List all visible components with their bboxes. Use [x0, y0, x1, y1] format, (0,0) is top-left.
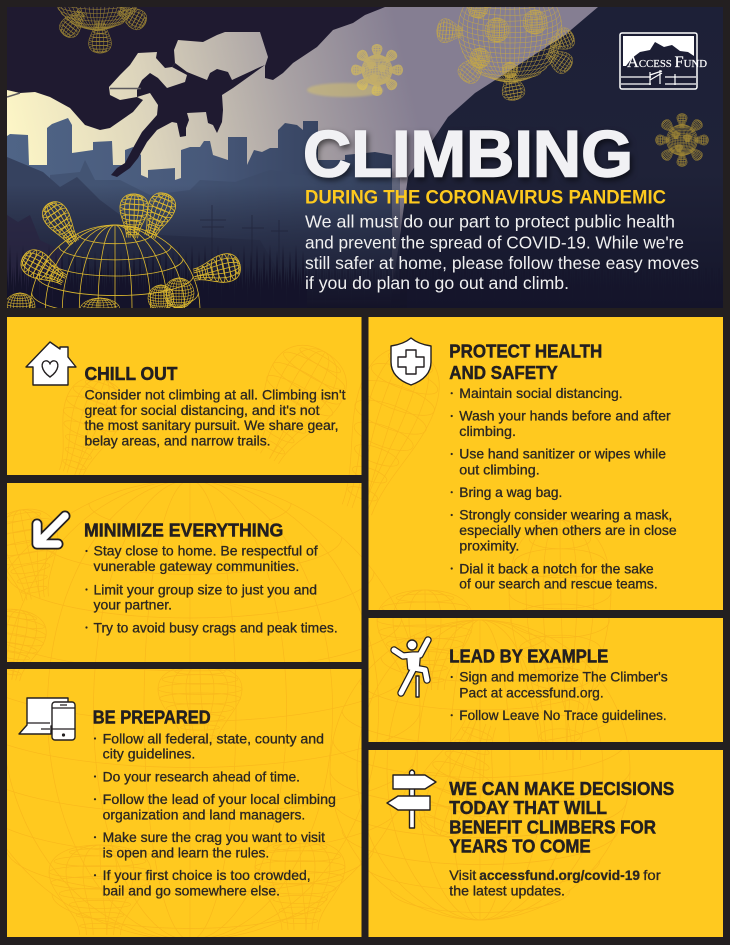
- bullet list: of our search and rescue teams.: [459, 577, 658, 592]
- icon: arrow: [37, 516, 65, 544]
- heading: PROTECT HEALTH: [449, 340, 602, 361]
- virus: mid-sky faded: [352, 44, 402, 96]
- bullet list: [94, 731, 336, 898]
- icon: laptop and phone: [19, 698, 75, 740]
- heading: WE CAN MAKE DECISIONS: [449, 778, 674, 799]
- icon: climber figure: [394, 640, 428, 697]
- heading: [449, 340, 602, 383]
- intro text: if you do plan to go out and climb.: [305, 273, 569, 293]
- intro text: and prevent the spread of COVID-19. While we're: [305, 232, 684, 252]
- bullet list: Limit your group size to just you and: [94, 582, 317, 597]
- bullet list: Stay close to home. Be respectful of: [94, 544, 318, 559]
- bullet list: city guidelines.: [103, 747, 195, 762]
- bullet list: Bring a wag bag.: [459, 485, 562, 500]
- icon: shield with cross: [391, 338, 431, 385]
- panel: minimize everything: [7, 483, 362, 662]
- panel: protect health and safety: [368, 317, 723, 610]
- yellow panel backgrounds with wireframe texture: [0, 317, 723, 940]
- virus: top right wireframe: [436, 7, 575, 100]
- bullet list: Make sure the crag you want to visit: [103, 830, 325, 845]
- bullet list: Follow all federal, state, county and: [103, 731, 324, 746]
- heading: MINIMIZE EVERYTHING: [84, 520, 283, 541]
- hills: [7, 157, 158, 245]
- panel: lead by example: [368, 618, 723, 742]
- body text: accessfund.org/covid-19: [479, 868, 640, 883]
- virus: large lower left: [7, 192, 241, 308]
- title: CLIMBING: [303, 116, 633, 190]
- rope: [7, 88, 141, 97]
- body text: for: [643, 868, 661, 883]
- heading: CHILL OUT: [84, 363, 178, 384]
- bullet list: your partner.: [94, 598, 172, 613]
- intro text: [305, 212, 699, 293]
- bullet list: out climbing.: [459, 462, 540, 477]
- bullet list: Dial it back a notch for the sake: [459, 561, 654, 576]
- power poles: [200, 205, 288, 256]
- intro text: We all must do our part to protect public health: [305, 212, 675, 232]
- sky: [7, 7, 598, 280]
- subtitle: DURING THE CORONAVIRUS PANDEMIC: [305, 188, 666, 209]
- bullet list: bail and go somewhere else.: [103, 883, 280, 898]
- bullet list: Use hand sanitizer or wipes while: [459, 447, 666, 462]
- body text: the latest updates.: [449, 883, 565, 898]
- virus: top left: [58, 7, 147, 54]
- bullet list: proximity.: [459, 538, 519, 553]
- bullet list: Wash your hands before and after: [459, 409, 671, 424]
- icon: house with heart: [26, 342, 76, 385]
- dark fade: [7, 185, 407, 308]
- logo: Access Fund: [620, 33, 707, 89]
- dark night slope: [390, 7, 723, 308]
- bullet list: If your first choice is too crowded,: [103, 868, 311, 883]
- bullet list: Follow the lead of your local climbing: [103, 792, 336, 807]
- dark trees at far left: [7, 215, 66, 295]
- city skyline: [7, 118, 392, 300]
- rock overhang: [7, 7, 385, 130]
- heading: BENEFIT CLIMBERS FOR: [449, 816, 656, 837]
- heading: [449, 778, 674, 856]
- body text: belay areas, and narrow trails.: [84, 434, 270, 449]
- bullet list: Pact at accessfund.org.: [459, 685, 604, 700]
- bullet list: organization and land managers.: [103, 807, 305, 822]
- bullet list: Do your research ahead of time.: [103, 769, 300, 784]
- bullet list: Maintain social distancing.: [459, 386, 623, 401]
- bullet list: climbing.: [459, 424, 516, 439]
- heading: BE PREPARED: [93, 706, 211, 727]
- bullet list: [85, 544, 338, 635]
- bullet list: Sign and memorize The Climber's: [459, 670, 668, 685]
- climber silhouette: [111, 63, 265, 177]
- bullet list: [451, 386, 677, 592]
- ground blob under faded virus: [307, 83, 383, 97]
- panel: chill out: [7, 317, 362, 475]
- logo: Access Fund: ACCESS FUND: [627, 54, 707, 71]
- panel: be prepared: [7, 669, 362, 937]
- bullet list: vunerable gateway communities.: [94, 559, 299, 574]
- bullet list: Strongly consider wearing a mask,: [459, 508, 672, 523]
- bullet list: Try to avoid busy crags and peak times.: [94, 620, 338, 635]
- grass: [7, 249, 306, 308]
- heading: YEARS TO COME: [449, 835, 591, 856]
- body text: Visit: [449, 868, 476, 883]
- bullet list: especially when others are in close: [459, 523, 677, 538]
- icon: signpost: [387, 770, 436, 828]
- body text: the most sanitary pursuit. We share gear,: [84, 418, 338, 433]
- bullet list: is open and learn the rules.: [103, 845, 269, 860]
- body text: [84, 388, 346, 449]
- intro text: still safer at home, please follow these easy moves: [305, 253, 699, 273]
- header banner: [7, 7, 723, 308]
- heading: AND SAFETY: [449, 362, 558, 383]
- bullet list: [451, 670, 668, 723]
- body text: great for social distancing, and it's not: [84, 403, 320, 418]
- virus: small right: [656, 114, 708, 166]
- panel: we can make decisions: [368, 750, 723, 937]
- body text: Consider not climbing at all. Climbing isn't: [84, 388, 346, 402]
- heading: TODAY THAT WILL: [449, 797, 607, 818]
- heading: LEAD BY EXAMPLE: [449, 645, 608, 666]
- near buildings: [50, 160, 400, 279]
- bullet list: Follow Leave No Trace guidelines.: [459, 708, 667, 723]
- body text: [449, 868, 661, 898]
